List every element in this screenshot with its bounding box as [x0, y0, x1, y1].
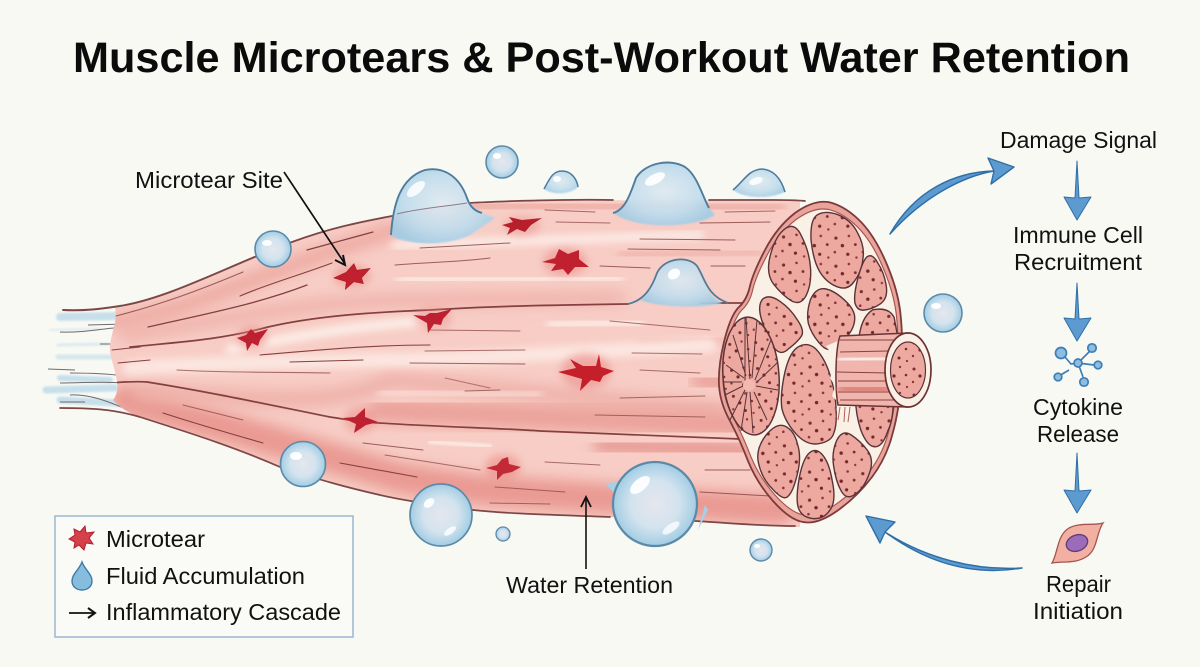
- microtear stars: [237, 216, 614, 480]
- label: repair initiation: Initiation: [1033, 598, 1123, 624]
- large bubble at lower surface: [606, 462, 708, 546]
- legend icon: microtear: [69, 526, 94, 550]
- cross section of muscle: [719, 202, 931, 523]
- bubble: [410, 484, 472, 546]
- bubble: [486, 146, 518, 178]
- protruding single fibre: [835, 333, 931, 422]
- bubble: [924, 294, 962, 332]
- inner connective tissue: [723, 209, 898, 515]
- bubble: [496, 527, 510, 541]
- curved arrow: muscle to damage signal: [890, 158, 1014, 234]
- fascicles: [758, 212, 898, 519]
- label: repair initiation: Repair: [1046, 571, 1111, 597]
- microtear 8: [485, 454, 521, 480]
- label: cytokine release: Release: [1037, 421, 1119, 447]
- torn fascicle crack: [826, 338, 845, 412]
- label: microtear site: Microtear Site: [135, 167, 283, 193]
- label: immune cell recruitment: Recruitment: [1014, 249, 1143, 275]
- legend text: microtear: Microtear: [106, 526, 205, 552]
- dome: small upper right: [733, 169, 785, 197]
- label: cytokine release: Cytokine: [1033, 394, 1123, 420]
- dome: large upper left: [391, 169, 495, 243]
- icon: cytokine molecule: [1054, 344, 1102, 386]
- legend: [55, 516, 353, 637]
- dome: large upper middle: [613, 163, 715, 225]
- radial spoked fascicle: [719, 315, 783, 437]
- fluid domes on muscle surface: [391, 163, 785, 306]
- free water bubbles: [255, 146, 962, 561]
- microtear 6: [558, 353, 614, 391]
- label: water retention: Water Retention: [506, 572, 673, 598]
- label: immune cell recruitment: Immune Cell: [1013, 222, 1143, 248]
- curved arrow: repair back to muscle: [866, 516, 1022, 570]
- legend text: fluid accumulation: Fluid Accumulation: [106, 563, 305, 589]
- arrow: microtear site pointer: [284, 172, 345, 265]
- fascicle nuclei dots: [758, 212, 898, 519]
- icon: repair cell: [1052, 523, 1103, 563]
- bubble: [280, 442, 326, 486]
- microtear 1: [333, 264, 371, 289]
- dome: small upper centre: [544, 171, 578, 193]
- cascade panel: [866, 127, 1157, 624]
- arrow: step 3: [1064, 453, 1091, 513]
- bubble: [750, 539, 772, 561]
- label: damage signal: Damage Signal: [1000, 127, 1157, 153]
- dome: mid-body blister: [628, 259, 728, 306]
- muscle outline: [60, 200, 805, 526]
- legend icon: fluid drop: [72, 562, 92, 590]
- frayed tendon end: [46, 316, 128, 410]
- bubble: [255, 231, 291, 267]
- arrow: water retention pointer: [581, 497, 591, 569]
- outer epimysium: [719, 202, 902, 523]
- title: Muscle Microtears & Post-Workout Water Retention: [73, 34, 1130, 82]
- microtear 7: [343, 407, 378, 433]
- legend text: inflammatory cascade: Inflammatory Cascade: [106, 599, 341, 625]
- legend icon: arrow: [69, 608, 95, 618]
- microtear 3: [542, 248, 589, 276]
- legend frame: [55, 516, 353, 637]
- microtear 4: [413, 308, 452, 333]
- arrow: step 2: [1064, 283, 1091, 341]
- muscle bundle body: [60, 200, 805, 527]
- muscle fibre lines: [110, 210, 775, 504]
- microtear 5: [237, 326, 268, 351]
- arrow: step 1: [1064, 161, 1091, 220]
- microtear 2: [502, 216, 542, 236]
